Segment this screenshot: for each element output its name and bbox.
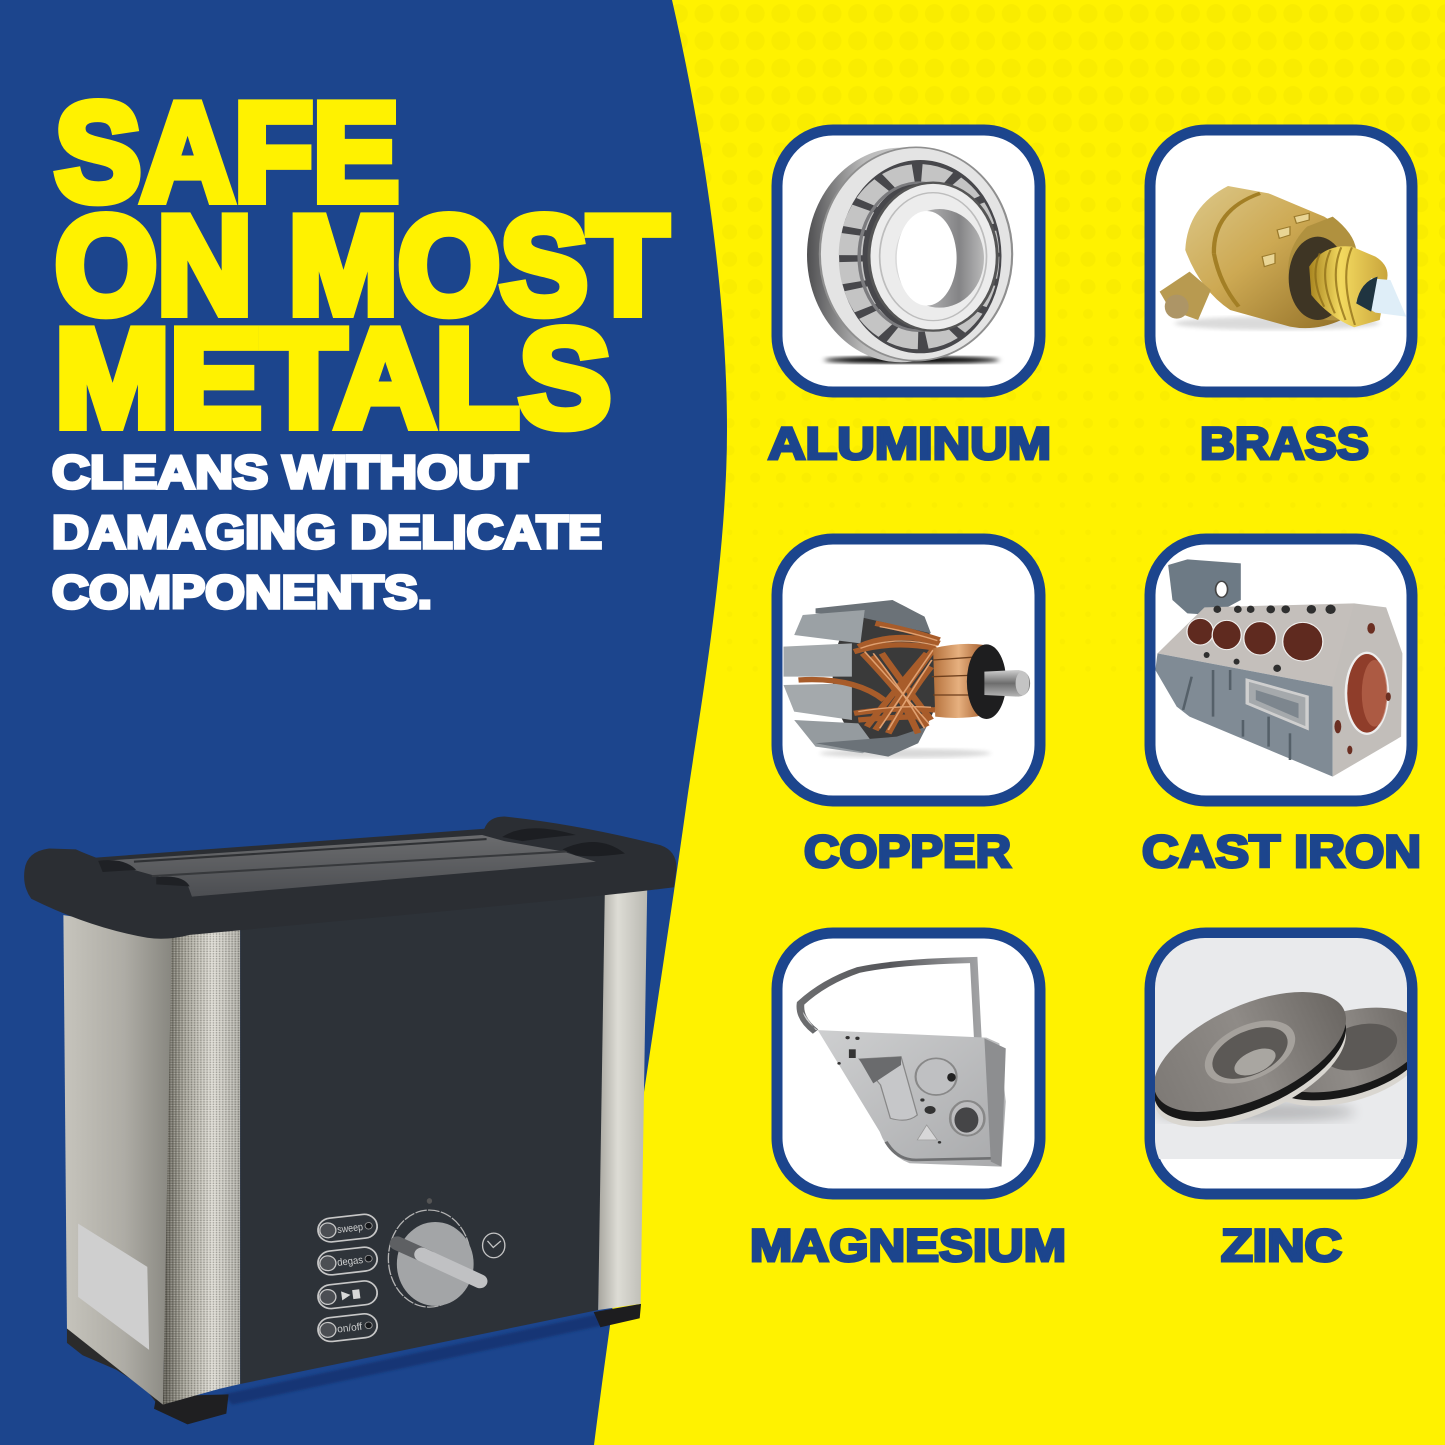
headline: safe on most metals: SAFE	[55, 75, 399, 230]
card frame	[1150, 933, 1412, 1194]
timer dial	[388, 1198, 480, 1307]
card frame	[777, 933, 1040, 1194]
card frame	[777, 130, 1040, 392]
card frame	[777, 539, 1040, 801]
subheading text: DAMAGING DELICATE	[52, 506, 602, 558]
ultrasonic cleaner product	[24, 816, 676, 1424]
bearing image	[807, 147, 1012, 364]
label: magnesium: MAGNESIUM	[750, 1220, 1066, 1271]
card: cast iron engine block	[1150, 539, 1412, 801]
subheading text: COMPONENTS.	[52, 566, 432, 618]
black lid	[24, 816, 676, 939]
label: brass: BRASS	[1200, 418, 1369, 469]
control buttons: sweep	[337, 1222, 364, 1236]
control buttons	[317, 1213, 379, 1343]
card: aluminum bearing	[777, 130, 1040, 392]
right steel side	[598, 884, 647, 1310]
card frame	[1150, 539, 1412, 801]
label: copper: COPPER	[804, 826, 1011, 877]
engine block image	[1155, 559, 1402, 777]
brake discs image	[1155, 938, 1407, 1159]
textured steel corner	[163, 923, 240, 1405]
headline: safe on most metals: METALS	[55, 301, 611, 456]
dark front panel	[240, 888, 606, 1384]
card: magnesium car door	[777, 933, 1040, 1194]
label: zinc: ZINC	[1221, 1220, 1342, 1271]
subheading text: CLEANS WITHOUT	[52, 446, 528, 498]
label: aluminum: ALUMINUM	[768, 418, 1051, 469]
copper rotor image	[784, 600, 1030, 758]
control buttons: on/off	[337, 1321, 363, 1335]
subheading text	[52, 446, 602, 618]
card: copper rotor	[777, 539, 1040, 801]
blue curved panel	[0, 0, 727, 1445]
headline: safe on most metals	[55, 75, 668, 456]
cleaner shadow and feet	[67, 1304, 641, 1424]
card frame	[1150, 130, 1412, 392]
car door image	[800, 960, 1006, 1167]
headline: safe on most metals: ON MOST	[55, 188, 668, 343]
clock icon	[483, 1233, 505, 1258]
left steel side	[63, 915, 174, 1405]
brass fitting image	[1160, 186, 1406, 330]
card: zinc brake discs	[1137, 930, 1435, 1194]
label: cast iron: CAST IRON	[1142, 826, 1421, 877]
control buttons: degas	[337, 1254, 364, 1269]
card: brass valve	[1150, 130, 1412, 392]
